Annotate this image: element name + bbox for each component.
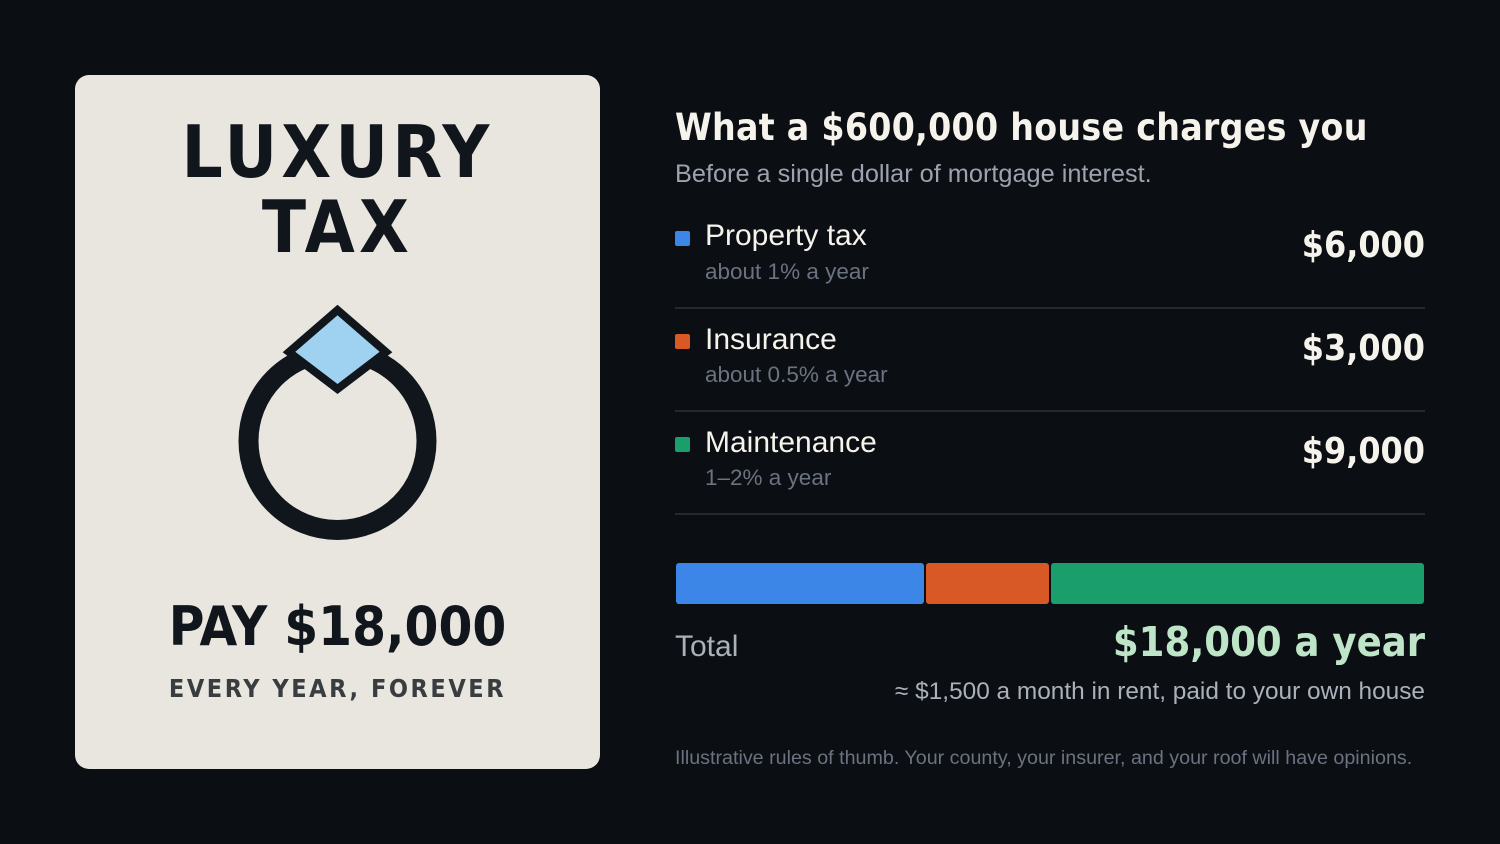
- note: property tax: about 1% a year: [705, 259, 869, 284]
- bar: property tax: [676, 563, 924, 604]
- heading: luxury tax: [182, 110, 493, 269]
- note: monthly equivalent: ≈ $1,500 a month in rent, paid to your own house: [895, 678, 1425, 705]
- value: total per year: $18,000 a year: [1113, 618, 1425, 666]
- amount: insurance: $3,000: [1302, 328, 1425, 369]
- bar: maintenance: [1051, 563, 1424, 604]
- subheading: Before a single dollar of mortgage interest.: [675, 160, 1152, 188]
- panel: poster card: [75, 75, 600, 769]
- label: total: Total: [675, 630, 738, 663]
- caption: every year forever: EVERY YEAR, FOREVER: [169, 674, 506, 703]
- bar: insurance: [926, 563, 1049, 604]
- swatch: insurance: [675, 334, 690, 349]
- label: insurance: Insurance: [705, 323, 837, 356]
- stacked bar chart: [676, 563, 1424, 604]
- note: maintenance: 1–2% a year: [705, 465, 831, 490]
- amount: maintenance: $9,000: [1302, 431, 1425, 472]
- footnote: Illustrative rules of thumb. Your county, your insurer, and your roof will have opinions.: [675, 747, 1412, 769]
- callout: pay amount: PAY $18,000: [169, 595, 506, 658]
- heading: luxury tax: LUXURY: [182, 110, 493, 194]
- label: maintenance: Maintenance: [705, 426, 877, 459]
- note: insurance: about 0.5% a year: [705, 362, 888, 387]
- heading: luxury tax: TAX: [262, 185, 413, 269]
- label: property tax: Property tax: [705, 219, 867, 252]
- swatch: maintenance: [675, 437, 690, 452]
- icon: diamond ring: [238, 304, 436, 540]
- swatch: property tax: [675, 231, 690, 246]
- heading: what a house charges: What a $600,000 house charges you: [675, 106, 1368, 149]
- amount: property tax: $6,000: [1302, 225, 1425, 266]
